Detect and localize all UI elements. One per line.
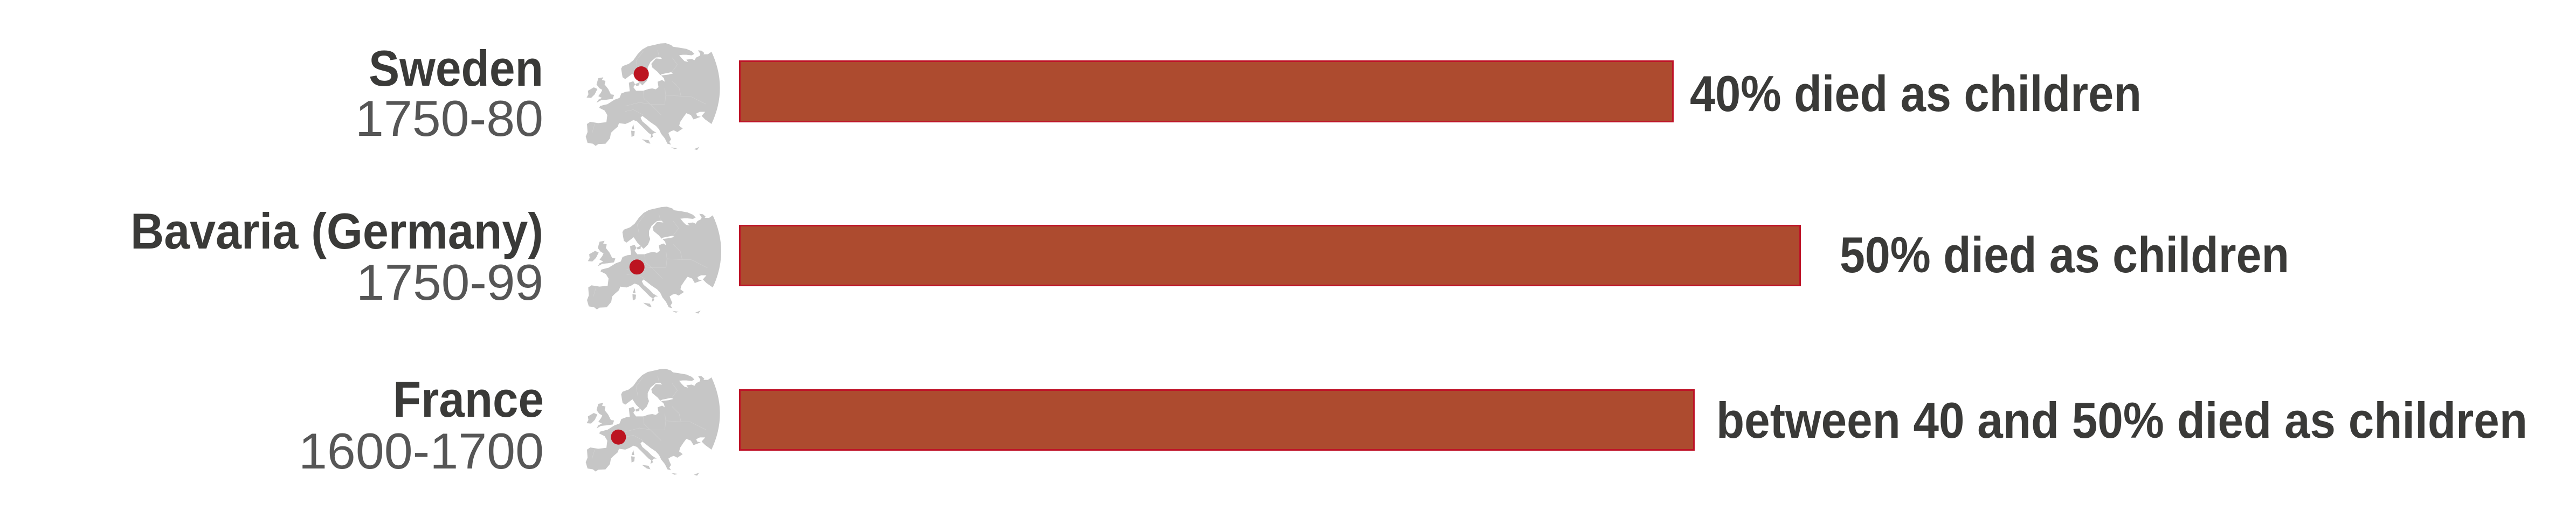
bar: Sweden xyxy=(740,61,1673,122)
label: period 1750-80: 1750-80 xyxy=(355,90,543,147)
row: Sweden xyxy=(355,40,2142,150)
icon: map of Europe with marker on Bavaria xyxy=(587,206,721,314)
label: France: France xyxy=(393,371,544,428)
label: Sweden: Sweden xyxy=(369,40,543,97)
value label: Sweden: 40% died as children xyxy=(1690,65,2142,122)
label: period 1600-1700: 1600-1700 xyxy=(299,423,544,479)
icon: map of Europe with marker on Sweden xyxy=(586,43,720,150)
row: Bavaria (Germany) xyxy=(130,203,2289,314)
label: period 1750-99: 1750-99 xyxy=(356,254,543,311)
bar: France xyxy=(740,390,1694,450)
bar: Bavaria xyxy=(740,225,1800,286)
value label: Bavaria: 50% died as children xyxy=(1840,226,2289,283)
row: France xyxy=(299,369,2527,479)
icon: map of Europe with marker on France xyxy=(586,369,720,475)
label: Bavaria (Germany): Bavaria (Germany) xyxy=(130,203,543,259)
